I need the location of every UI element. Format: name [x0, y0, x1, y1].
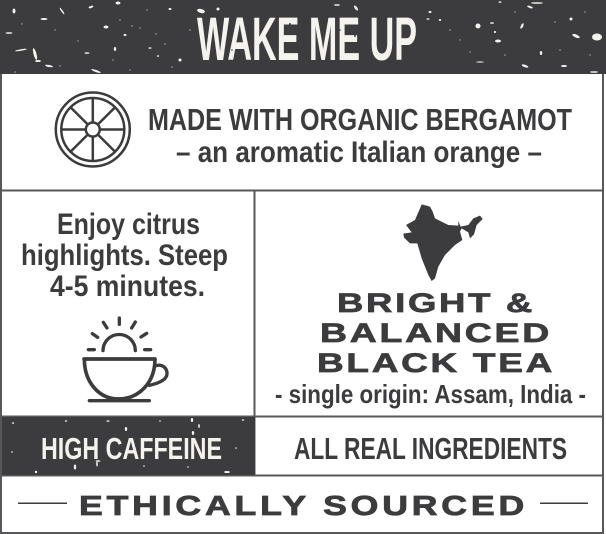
heading: bright and balanced black tea: BLACK TEA [317, 348, 555, 378]
text: steeping instructions: Enjoy citrus [57, 208, 200, 241]
heading: bright and balanced black tea: BALANCED [320, 318, 552, 348]
panel: high caffeine [2, 417, 255, 475]
icon: map of india [403, 204, 483, 281]
banner: ethically sourced: ETHICALLY SOURCED [79, 490, 528, 521]
icon: bergamot orange slice [56, 92, 130, 166]
text: steeping instructions: highlights. Steep [21, 239, 228, 272]
title: WAKE ME UP [197, 5, 417, 73]
heading: bright and balanced black tea [317, 288, 555, 378]
text: steeping instructions [21, 208, 228, 303]
text: steeping instructions: 4-5 minutes. [50, 270, 205, 303]
icon: tea cup with rising sun [84, 318, 167, 401]
heading: bright and balanced black tea: BRIGHT & [337, 288, 535, 318]
text: aromatic italian orange: – an aromatic Italian orange – [176, 136, 542, 169]
label: high caffeine: HIGH CAFFEINE [41, 431, 222, 466]
panel: header band [0, 0, 606, 74]
